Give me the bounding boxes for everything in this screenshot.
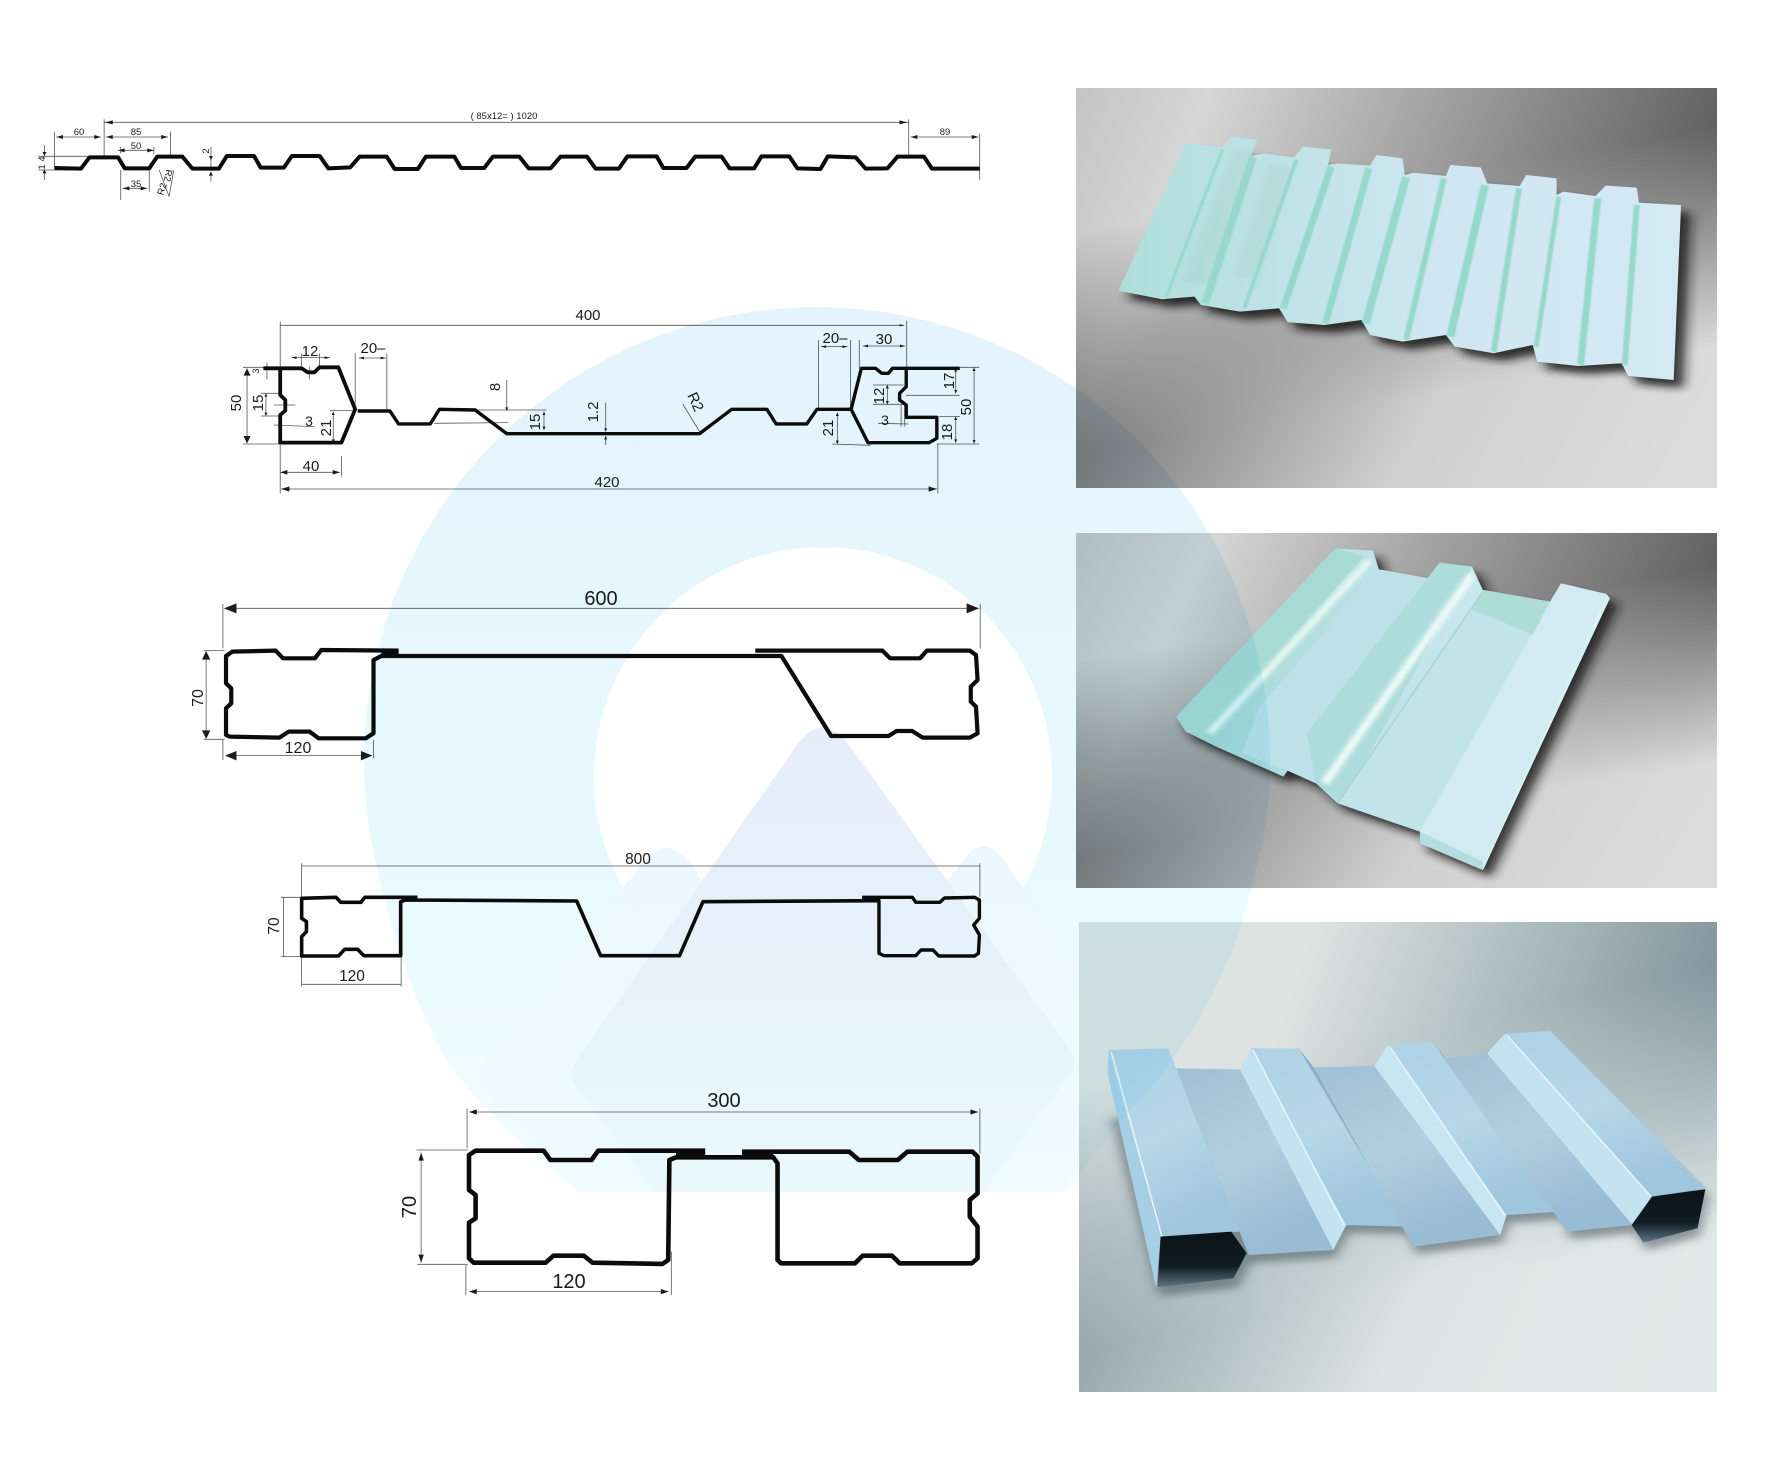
dimension labels 2: 15 (527, 414, 544, 430)
dimension labels 3: 70 (190, 689, 207, 707)
dimension labels 2: 12 (871, 388, 888, 404)
profile drawing 2: 400 / 420 (228, 307, 979, 493)
dimension labels 2: 3 (881, 412, 889, 428)
profile outline 1 (54, 156, 980, 169)
dimension labels 2: 20– (822, 330, 848, 347)
hollow end left (1158, 1232, 1246, 1287)
dimension labels 1: 50 (131, 141, 141, 152)
profile outline 5 (469, 1151, 978, 1264)
dimension labels 1 (37, 111, 950, 197)
sheet 2 metal (1176, 548, 1610, 870)
dimension labels 2: 50 (228, 395, 245, 411)
dimension labels 2: 21 (318, 420, 335, 436)
dimension labels 5: 120 (552, 1271, 586, 1293)
dimension labels 1: 1 4 (37, 156, 48, 170)
dimension labels 5: 70 (399, 1196, 421, 1218)
dimension labels 2: 1.2 (585, 402, 602, 422)
dimension labels 3 (190, 588, 618, 757)
dimension labels 2: 8 (487, 383, 504, 391)
dimension labels 1: ( 85x12= ) 1020 (471, 111, 537, 122)
dimension labels 2: 12 (302, 343, 318, 360)
hollow end right (1632, 1189, 1705, 1243)
dimension labels 1: R2 (156, 182, 170, 197)
dimension labels 2: 420 (594, 474, 620, 491)
dimension labels 2: 20– (360, 340, 386, 357)
dimension lines 4 (281, 863, 980, 987)
sheet 2 shadow (1184, 556, 1618, 877)
sheet 1 corrugated metal (1119, 137, 1681, 380)
dimension labels 1: 60 (74, 127, 84, 138)
dimension lines 1 (38, 119, 980, 200)
watermark logo (364, 307, 1270, 1192)
dimension labels 4: 800 (625, 851, 651, 868)
profile drawing 1: 1020 corrugated (37, 111, 980, 200)
profile outline 3 (226, 650, 978, 738)
dimension labels 2 (228, 307, 975, 491)
dimension labels 2: 30 (876, 331, 892, 348)
dimension labels 5 (399, 1090, 741, 1293)
dimension labels 2: 3 (305, 413, 313, 429)
dimension lines 2 (243, 321, 979, 493)
dimension labels 2: 17 (941, 373, 958, 389)
dimension labels 4: 120 (339, 968, 365, 985)
sheet 1 shadow (1128, 151, 1691, 388)
photo panel: corrugated sheet (1076, 88, 1717, 488)
profile drawing 4: 800 (266, 851, 980, 987)
sheet 3 shadow (1111, 1085, 1709, 1296)
dimension labels 2: 18 (939, 424, 956, 440)
profile drawing 5: 300 (399, 1090, 980, 1295)
dimension labels 3: 120 (285, 740, 311, 757)
dimension labels 1: 35 (131, 179, 141, 190)
panel 1 backdrop (1076, 88, 1717, 488)
dimension labels 1: R2 (161, 168, 174, 182)
dimension labels 1: 85 (131, 127, 141, 138)
dimension labels 2: 3 (251, 368, 261, 374)
dimension lines 3 (202, 603, 980, 760)
dimension labels 2: 15 (250, 395, 267, 411)
dimension labels 2: R2 (683, 390, 707, 414)
dimension labels 2: 50 (958, 399, 975, 415)
dimension labels 4 (266, 851, 651, 985)
dimension labels 3: 600 (584, 588, 618, 610)
dimension lines 5 (416, 1108, 980, 1295)
dimension labels 1: 89 (940, 127, 950, 138)
profile outline 4 (302, 897, 979, 956)
sheet 3 metal (1108, 1031, 1706, 1288)
profile drawing 3: 600 (190, 588, 980, 760)
photo panel: deep-rib hollow sheet (1079, 922, 1717, 1392)
dimension labels 2: 21 (820, 420, 837, 436)
panel 2 backdrop (1076, 533, 1717, 888)
dimension labels 2: 400 (575, 307, 601, 324)
dimension labels 1: 2 (201, 148, 212, 154)
photo panel: wide-rib sheet (1076, 533, 1717, 888)
panel 3 backdrop (1079, 922, 1717, 1392)
dimension labels 5: 300 (707, 1090, 741, 1112)
dimension labels 2: 40 (303, 458, 319, 475)
dimension labels 4: 70 (266, 917, 283, 935)
profile outline 2 (263, 367, 960, 443)
